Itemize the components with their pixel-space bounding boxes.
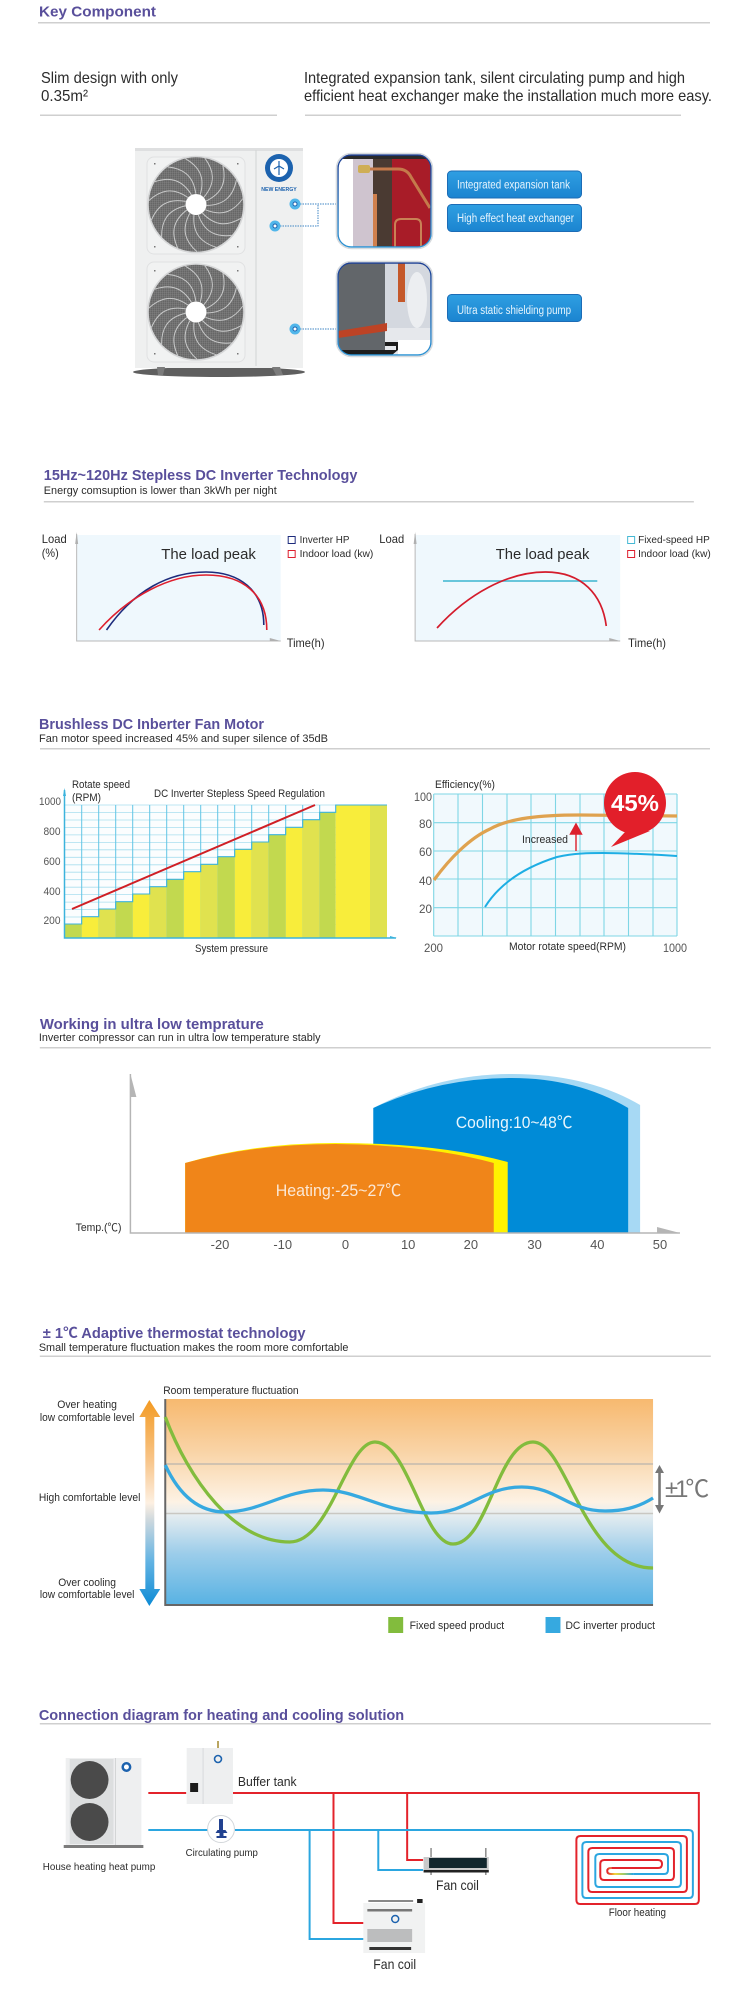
chart: inverter load curve: Load <box>42 534 67 546</box>
text: integrated description: efficient heat exchanger make the installation much more easy. <box>304 88 712 105</box>
chart: rotate speed steps: DC Inverter Stepless Speed Regulation <box>154 788 325 800</box>
legend: Indoor load (kw) <box>300 549 373 560</box>
chart: fixed-speed load curve: Time(h) <box>628 638 666 650</box>
axis numbers: 60 <box>419 845 432 859</box>
arrow: comfort scale <box>139 1400 160 1606</box>
subheading: energy consumption: Energy comsuption is lower than 3kWh per night <box>44 485 277 497</box>
axis numbers: 800 <box>44 826 60 838</box>
axis numbers: 80 <box>419 817 432 831</box>
chart: efficiency curves <box>414 772 687 955</box>
section: adaptive thermostat <box>39 1326 711 1633</box>
icon: buffer tank: Buffer tank <box>238 1774 297 1789</box>
icon: house heating heat pump: House heating heat pump <box>43 1862 155 1873</box>
area: cooling range <box>373 1074 640 1233</box>
chart: working temperature ranges <box>76 1074 680 1252</box>
axis numbers <box>211 1237 667 1252</box>
axis numbers: 10 <box>401 1237 415 1252</box>
axis numbers <box>414 790 687 955</box>
chart: rotate speed steps: System pressure <box>195 943 268 955</box>
comfort level labels: Over cooling <box>58 1577 116 1589</box>
text: integrated description <box>304 70 712 105</box>
comfort level labels: High comfortable level <box>39 1492 140 1504</box>
photo panel: shielding pump <box>336 262 432 356</box>
heading: stepless DC inverter: 15Hz~120Hz Stepless DC Inverter Technology <box>44 468 357 484</box>
icon: circulating pump <box>186 1816 258 1859</box>
axis numbers: -10 <box>273 1237 292 1252</box>
callout: plus minus one degree: ±1℃ <box>665 1476 708 1503</box>
icon: ducted fan coil: Fan coil <box>436 1878 479 1893</box>
subheading: inverter compressor: Inverter compressor can run in ultra low temperature stably <box>39 1032 321 1044</box>
callout: plus minus one degree <box>655 1465 708 1514</box>
heading: fan motor: Brushless DC Inberter Fan Motor <box>39 717 264 733</box>
chart: fixed-speed load curve <box>379 532 711 650</box>
section: connection diagram <box>39 1708 711 1972</box>
button: ultra static shielding pump: Ultra static shielding pump <box>457 305 571 317</box>
axis numbers: 1000 <box>39 796 61 808</box>
text: integrated description: Integrated expansion tank, silent circulating pump and high <box>304 70 685 87</box>
line: DC inverter product <box>165 1465 653 1513</box>
chart: efficiency curves: Efficiency(%) <box>435 779 495 791</box>
text: slim design: 0.35m² <box>41 88 89 105</box>
heading: key component: Key Component <box>39 4 156 20</box>
icon: cassette fan coil: Fan coil <box>373 1957 416 1972</box>
chart: rotate speed steps <box>39 779 397 955</box>
button: high effect heat exchanger <box>448 204 582 232</box>
label: floor heating: Floor heating <box>609 1907 666 1919</box>
comfort level labels: low comfortable level <box>40 1589 134 1601</box>
axis numbers: 200 <box>44 915 60 927</box>
chart: room temperature fluctuation: Room temperature fluctuation <box>163 1385 299 1397</box>
area: heating range: Heating:-25~27℃ <box>276 1182 401 1200</box>
comfort level labels: Over heating <box>57 1399 117 1411</box>
callout: 45%: 45% <box>611 790 659 816</box>
chart: working temperature ranges: Temp.(℃) <box>76 1222 121 1234</box>
axis numbers: 40 <box>419 874 432 888</box>
legend <box>288 535 373 560</box>
legend: Fixed speed product <box>410 1620 504 1632</box>
area: cooling range: Cooling:10~48℃ <box>456 1114 572 1132</box>
icon: new energy logo <box>261 154 297 193</box>
section: fan motor <box>39 717 710 955</box>
bars <box>64 805 387 938</box>
legend: Fixed-speed HP <box>638 535 710 546</box>
icon: new energy logo: NEW ENERGY <box>261 187 297 193</box>
axis numbers: -20 <box>211 1237 229 1252</box>
chart: inverter load curve: (%) <box>42 548 59 560</box>
subheading: small temperature fluctuation: Small temperature fluctuation makes the room more comfortable <box>39 1342 348 1354</box>
line: fixed speed product <box>165 1417 653 1568</box>
chart: inverter load curve: Time(h) <box>287 638 325 650</box>
chart: room temperature fluctuation <box>163 1385 653 1605</box>
chart: inverter load curve <box>42 532 373 650</box>
axis numbers: 30 <box>527 1237 542 1252</box>
icon: heat pump unit <box>133 148 305 377</box>
callout connectors <box>270 198 336 334</box>
icon: cassette fan coil <box>363 1899 425 1972</box>
icon: house heating heat pump <box>43 1758 155 1873</box>
heading: ultra low temperature: Working in ultra low temprature <box>40 1017 264 1033</box>
button: ultra static shielding pump <box>448 294 582 322</box>
legend <box>628 535 711 560</box>
pipes: red supply <box>148 1793 699 1923</box>
chart: rotate speed steps: (RPM) <box>72 792 101 804</box>
text: slim design <box>41 70 178 105</box>
icon: ducted fan coil <box>424 1848 489 1893</box>
photo panel: expansion tank and heat exchanger <box>336 154 432 248</box>
section: stepless DC inverter <box>42 468 711 650</box>
axis numbers: 1000 <box>663 941 687 955</box>
chart: efficiency curves: Motor rotate speed(RPM) <box>509 941 626 953</box>
axis numbers: 600 <box>44 856 60 868</box>
axis numbers: 20 <box>464 1237 478 1252</box>
section: ultra low temperature <box>39 1017 711 1252</box>
axis numbers: 0 <box>342 1237 349 1252</box>
heading: adaptive thermostat: ± 1℃ Adaptive thermostat technology <box>43 1326 306 1342</box>
chart: efficiency curves: Increased <box>522 834 568 846</box>
axis numbers: 20 <box>419 902 432 916</box>
chart: fixed-speed load curve: Load <box>379 534 404 546</box>
chart: rotate speed steps: Rotate speed <box>72 779 130 791</box>
axis numbers: 40 <box>590 1237 605 1252</box>
icon: buffer tank <box>187 1741 297 1804</box>
axis numbers <box>39 796 61 927</box>
heading: connection diagram: Connection diagram for heating and cooling solution <box>39 1708 404 1724</box>
comfort level labels: low comfortable level <box>40 1412 134 1424</box>
subheading: fan motor speed: Fan motor speed increased 45% and super silence of 35dB <box>39 733 328 745</box>
callout: 45% <box>604 772 666 847</box>
legend: Indoor load (kw) <box>638 549 711 560</box>
legend: Inverter HP <box>300 535 349 546</box>
icon: circulating pump: Circulating pump <box>186 1848 258 1859</box>
section: key component <box>38 4 712 377</box>
comfort level labels <box>39 1399 140 1601</box>
axis numbers: 200 <box>424 941 443 955</box>
area: heating range <box>185 1143 508 1233</box>
axis numbers: 400 <box>44 886 60 898</box>
button: integrated expansion tank <box>448 171 582 198</box>
button: high effect heat exchanger: High effect heat exchanger <box>457 213 574 225</box>
chart: inverter load curve: The load peak <box>161 546 256 563</box>
text: slim design: Slim design with only <box>41 70 178 87</box>
axis numbers: 100 <box>414 790 432 804</box>
button: integrated expansion tank: Integrated expansion tank <box>457 180 570 192</box>
legend <box>388 1617 655 1633</box>
chart: fixed-speed load curve: The load peak <box>496 546 590 563</box>
pipes: blue return <box>148 1830 693 1939</box>
axis numbers: 50 <box>653 1237 667 1252</box>
legend: DC inverter product <box>565 1620 655 1632</box>
